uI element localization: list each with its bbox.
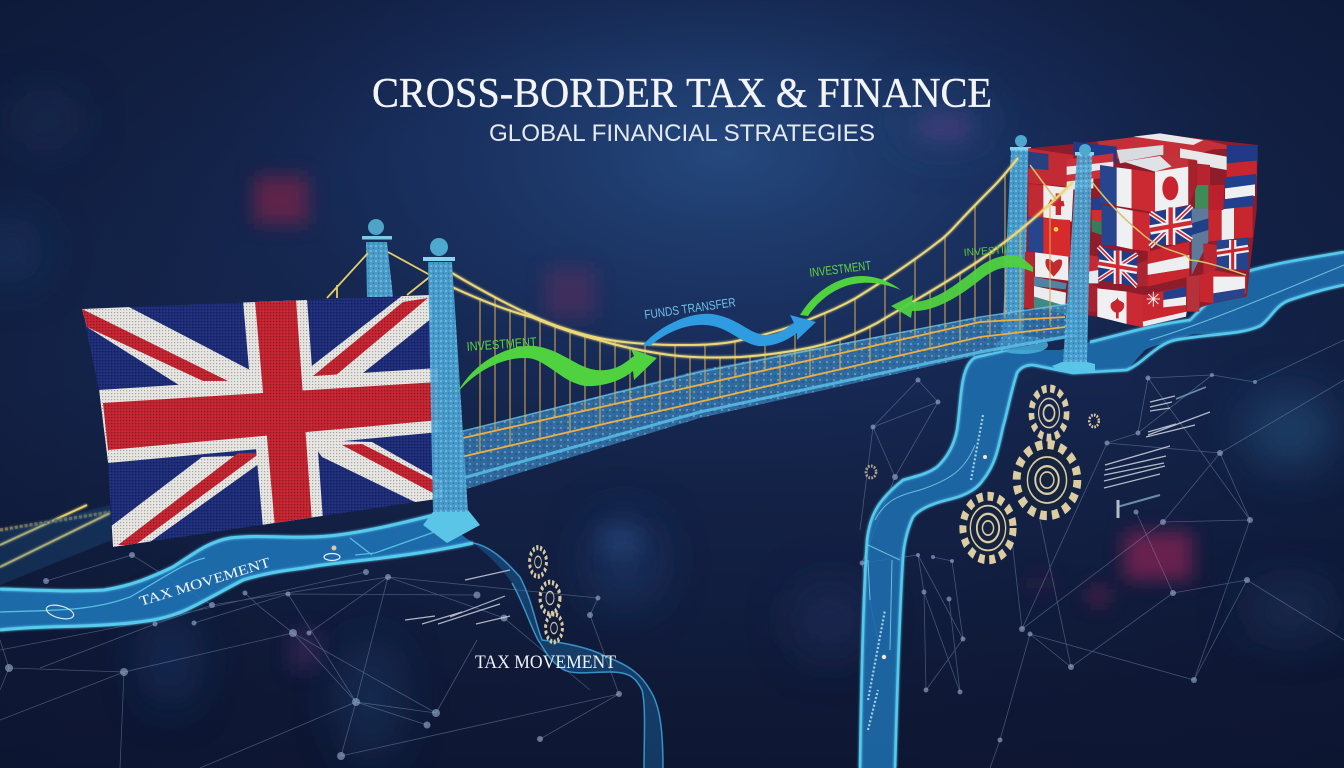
back towers xyxy=(362,135,1048,354)
label: tax movement: TAX MOVEMENT xyxy=(475,652,616,673)
left far cables xyxy=(0,505,110,567)
river: thin waterfall continuation xyxy=(473,543,663,768)
arrow: investment (green 3) xyxy=(891,255,1033,318)
UK flag xyxy=(82,295,443,547)
bridge deck xyxy=(459,303,1075,490)
main cables xyxy=(452,158,1073,358)
arrow: investment (green 2) xyxy=(800,276,901,316)
block of national flags xyxy=(1024,133,1258,327)
river: tax movement (left) xyxy=(0,515,473,630)
subtitle: GLOBAL FINANCIAL STRATEGIES xyxy=(489,120,875,147)
arrow: funds transfer (blue) xyxy=(643,314,816,346)
gears: small stack xyxy=(530,548,562,642)
label: investment 2: INVESTMENT xyxy=(809,258,872,280)
gears: large cluster xyxy=(866,388,1099,560)
front towers xyxy=(423,144,1095,543)
left deck remnant xyxy=(0,505,112,585)
data scribbles: lower left xyxy=(405,570,510,624)
bridge hangers xyxy=(480,172,1050,453)
label: investment 3: INVESTIII xyxy=(963,244,1010,259)
cables behind flag xyxy=(327,252,432,298)
cables over flag block xyxy=(1030,165,1246,275)
arrow: investment (green 1) xyxy=(457,346,657,393)
river label: tax movement: TAX MOVEMENT xyxy=(138,556,273,610)
label: investment 1: INVESTMENT xyxy=(466,334,537,354)
label: funds transfer: FUNDS TRANSFER xyxy=(643,295,737,322)
network nodes xyxy=(5,373,1257,760)
river: right vertical channel xyxy=(860,252,1344,768)
network of nodes xyxy=(0,340,1344,768)
title: CROSS-BORDER TAX & FINANCE xyxy=(372,71,992,117)
data scribbles: right xyxy=(1104,387,1210,518)
bridge rails xyxy=(461,317,1065,457)
